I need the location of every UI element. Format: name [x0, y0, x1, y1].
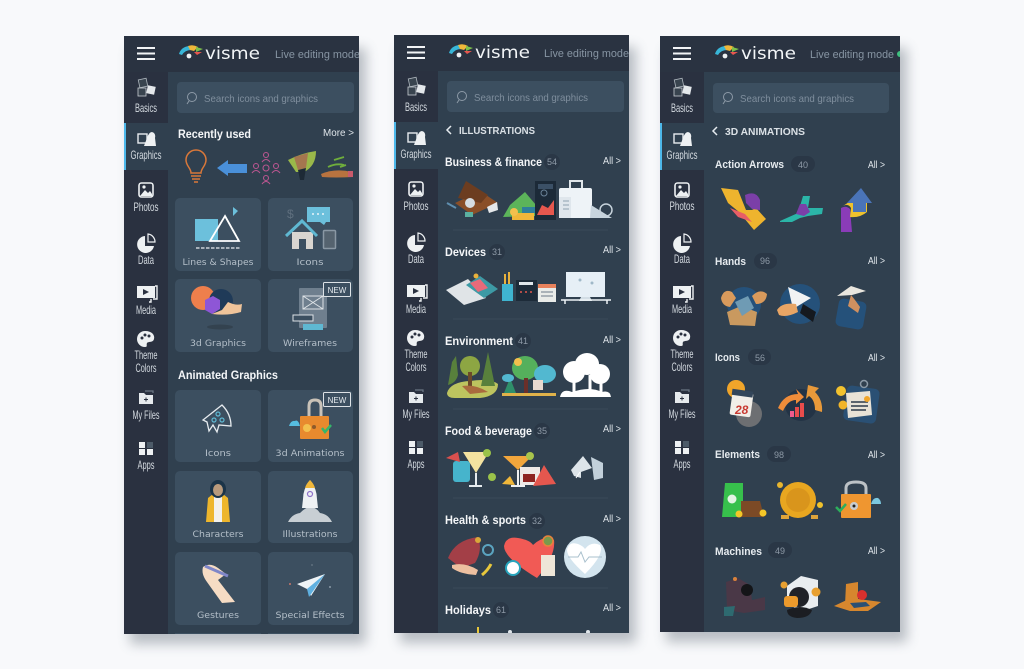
back heading: illustrations: [446, 126, 535, 134]
section: environment: All >: [603, 334, 621, 346]
sidebar navigation: Media: [406, 302, 426, 316]
sidebar navigation: Apps: [138, 458, 154, 472]
sidebar navigation: Graphics: [666, 148, 698, 162]
sidebar navigation: Basics: [405, 100, 427, 114]
card: lines and shapes: Lines & Shapes: [182, 258, 254, 268]
sidebar navigation: [130, 78, 162, 472]
section: icons: 56: [755, 353, 765, 363]
search box: Search icons and graphics: [474, 92, 588, 104]
card: wireframes: [268, 279, 353, 352]
sidebar navigation: Photos: [134, 200, 158, 214]
panel: 3d animations: [660, 36, 903, 632]
card: illustrations: Illustrations: [282, 530, 338, 540]
sidebar navigation: Basics: [671, 101, 693, 115]
search box: [713, 83, 889, 113]
card: icons: $: [287, 207, 294, 221]
sidebar navigation: [400, 77, 432, 471]
search box: [447, 81, 624, 112]
section: icons: 28: [734, 403, 749, 417]
heading: animated graphics: Animated Graphics: [178, 368, 278, 382]
sidebar navigation: Colors: [136, 361, 156, 375]
section: hands: All >: [868, 255, 885, 267]
logo: [449, 44, 529, 58]
sidebar navigation: Photos: [670, 199, 694, 213]
section: devices: Devices: [445, 245, 486, 259]
active tab highlight: [124, 123, 168, 170]
recently used icons: [186, 150, 353, 184]
section: icons: All >: [868, 352, 885, 364]
sidebar navigation: [666, 78, 698, 471]
back heading: illustrations: ILLUSTRATIONS: [459, 125, 535, 137]
card: special effects: [268, 552, 353, 625]
sidebar: hamburger icon: [407, 47, 425, 58]
card: 3d animations: [268, 390, 353, 462]
card: characters: Characters: [192, 530, 244, 540]
card: icons: Icons: [296, 258, 324, 268]
card: 3d animations: NEW: [328, 396, 347, 405]
section: business and finance: Business & finance: [445, 155, 542, 169]
section: holidays: [445, 602, 621, 634]
card: 3d graphics: [175, 279, 261, 352]
sidebar navigation: Media: [136, 303, 156, 317]
live editing label: Live editing mode: [275, 49, 360, 61]
active tab highlight: [660, 123, 704, 170]
panel: illustrations: [394, 35, 629, 634]
section: environment: [445, 333, 621, 409]
card: lines and shapes: [175, 198, 261, 271]
sidebar: hamburger icon: [673, 48, 691, 59]
section: machines: [715, 542, 885, 618]
sidebar navigation: My Files: [402, 407, 430, 421]
card: gestures: Gestures: [197, 611, 239, 621]
sidebar navigation: Basics: [135, 101, 157, 115]
sidebar navigation: My Files: [132, 408, 160, 422]
card: animated icons: Icons: [205, 449, 231, 459]
card: icons: [268, 198, 353, 271]
section: elements: 98: [774, 450, 784, 460]
card: special effects: Special Effects: [276, 611, 345, 621]
panel shadows: [130, 47, 907, 644]
logo: visme: [475, 43, 530, 63]
section: hands: [715, 253, 885, 330]
section: machines: All >: [868, 545, 885, 557]
card: characters: [175, 471, 261, 543]
search box: Search icons and graphics: [204, 93, 318, 105]
section: hands: Hands: [715, 256, 746, 268]
section: hands: 96: [760, 256, 770, 266]
sidebar navigation: My Files: [668, 407, 696, 421]
section: machines: 49: [775, 546, 785, 556]
more link: More >: [323, 127, 354, 139]
section: holidays: All >: [603, 602, 621, 614]
sidebar navigation: Graphics: [130, 148, 162, 162]
logo: [179, 45, 259, 59]
logo: visme: [205, 44, 260, 64]
section: action arrows: Action Arrows: [715, 159, 784, 171]
sidebar navigation: Photos: [404, 199, 428, 213]
section: action arrows: All >: [868, 159, 885, 171]
section: health and sports: Health & sports: [445, 513, 526, 527]
section: action arrows: [715, 156, 885, 232]
card: 3d animations: 3d Animations: [276, 449, 345, 459]
section: business and finance: 54: [547, 157, 557, 167]
section: environment: Environment: [445, 334, 513, 348]
card: 3d graphics: 3d Graphics: [190, 339, 246, 349]
section: action arrows: 40: [798, 160, 808, 170]
section: business and finance: All >: [603, 155, 621, 167]
section: elements: [715, 446, 885, 519]
back heading: 3d animations: 3D ANIMATIONS: [725, 126, 805, 138]
logo: [715, 45, 795, 59]
section: food and beverage: [445, 423, 621, 498]
sidebar navigation: Media: [672, 302, 692, 316]
card: gestures: [175, 552, 261, 625]
logo: visme: [741, 44, 796, 64]
live editing label: Live editing mode: [544, 48, 629, 60]
sidebar navigation: Data: [408, 252, 424, 266]
card: wireframes: NEW: [328, 286, 347, 295]
sidebar navigation: Theme: [134, 348, 158, 362]
sidebar navigation: Colors: [406, 360, 426, 374]
search box: [177, 82, 354, 113]
live editing label: Live editing mode: [810, 49, 894, 61]
section: elements: Elements: [715, 449, 760, 461]
sidebar navigation: Apps: [408, 457, 424, 471]
section: food and beverage: 35: [537, 426, 547, 436]
section: food and beverage: All >: [603, 423, 621, 435]
section: environment: 41: [518, 336, 528, 346]
sidebar navigation: Data: [138, 253, 154, 267]
card: animated icons: [175, 390, 261, 462]
section: business and finance: [445, 154, 621, 230]
sidebar navigation: Theme: [670, 347, 694, 361]
section: machines: Machines: [715, 546, 762, 558]
section: icons: Icons: [715, 352, 740, 364]
section: icons: [715, 349, 885, 427]
search box: Search icons and graphics: [740, 93, 854, 105]
section: devices: [445, 244, 621, 319]
section: food and beverage: Food & beverage: [445, 424, 532, 438]
sidebar navigation: Theme: [404, 347, 428, 361]
sidebar: hamburger icon: [137, 48, 155, 59]
sidebar navigation: Apps: [674, 457, 690, 471]
section: health and sports: All >: [603, 513, 621, 525]
active tab highlight: [394, 122, 438, 169]
sidebar navigation: Data: [674, 252, 690, 266]
sidebar navigation: Graphics: [400, 147, 432, 161]
section: holidays: 61: [496, 605, 506, 615]
heading: recently used: Recently used: [178, 127, 251, 141]
card: illustrations: [268, 471, 353, 543]
section: elements: All >: [868, 449, 885, 461]
section: health and sports: [445, 513, 621, 588]
sidebar navigation: Colors: [672, 360, 692, 374]
section: holidays: Holidays: [445, 603, 491, 617]
card: wireframes: Wireframes: [283, 339, 337, 349]
section: devices: All >: [603, 244, 621, 256]
section: devices: 31: [492, 247, 502, 257]
section: health and sports: 32: [532, 516, 542, 526]
panel: graphics menu: [124, 36, 360, 635]
